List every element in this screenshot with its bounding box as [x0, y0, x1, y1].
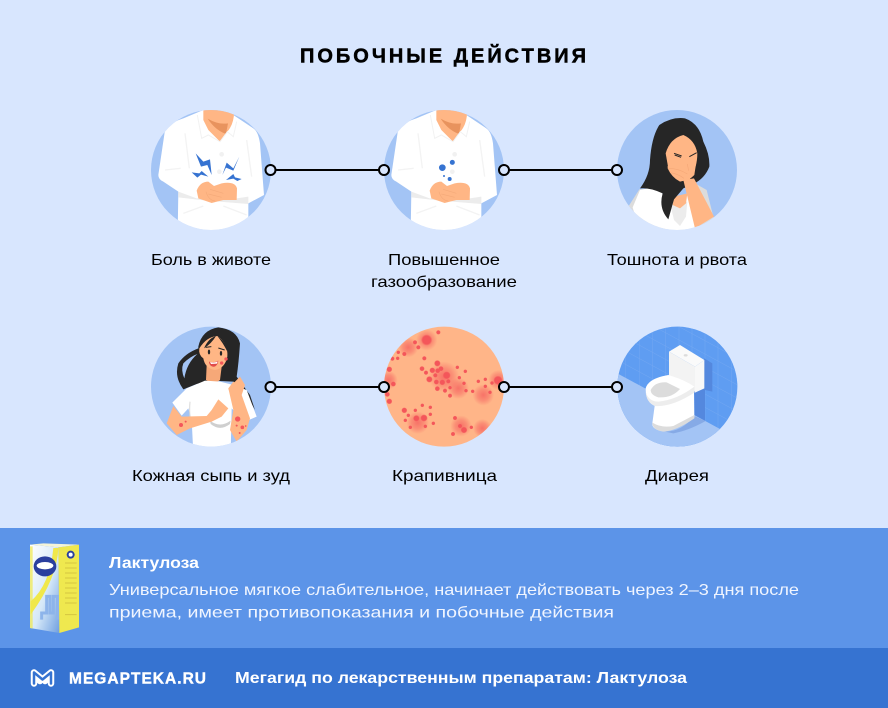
label: hives: Крапивница [392, 468, 497, 485]
label: gas [371, 252, 517, 291]
blotches [384, 330, 504, 436]
label: nausea: Тошнота и рвота [607, 252, 747, 269]
text: description: приема, имеет противопоказания и побочные действия [109, 604, 614, 622]
icon: hives skin [379, 327, 508, 447]
icon: logo [34, 672, 51, 684]
text: description: Универсальное мягкое слабительное, начинает действовать через 2–3 дня после [109, 582, 799, 599]
label: gas: Повышенное [388, 252, 500, 269]
label: rash: Кожная сыпь и зуд [132, 468, 291, 485]
title: ПОБОЧНЫЕ ДЕЙСТВИЯ [300, 44, 586, 68]
icon: lactulose box [30, 543, 79, 633]
label: abdominal pain: Боль в животе [151, 252, 271, 269]
icon: rash woman [151, 327, 271, 453]
logo text: MEGAPTEKA.RU [69, 670, 206, 688]
connector: row 1 [266, 165, 622, 175]
icon: gas [384, 109, 504, 233]
footer text: Мегагид по лекарственным препаратам: Лактулоза [235, 670, 687, 687]
connector: row 2 [266, 382, 622, 392]
text: description [109, 582, 799, 622]
icon: nausea woman [617, 110, 737, 233]
panel: drug info [0, 528, 888, 648]
footer [0, 648, 888, 708]
heading: drug name: Лактулоза [109, 555, 199, 572]
icon: toilet [618, 326, 738, 447]
label: diarrhea: Диарея [645, 468, 709, 485]
icon: abdominal pain [151, 109, 271, 233]
label: gas: газообразование [371, 274, 517, 291]
spots [385, 330, 503, 436]
